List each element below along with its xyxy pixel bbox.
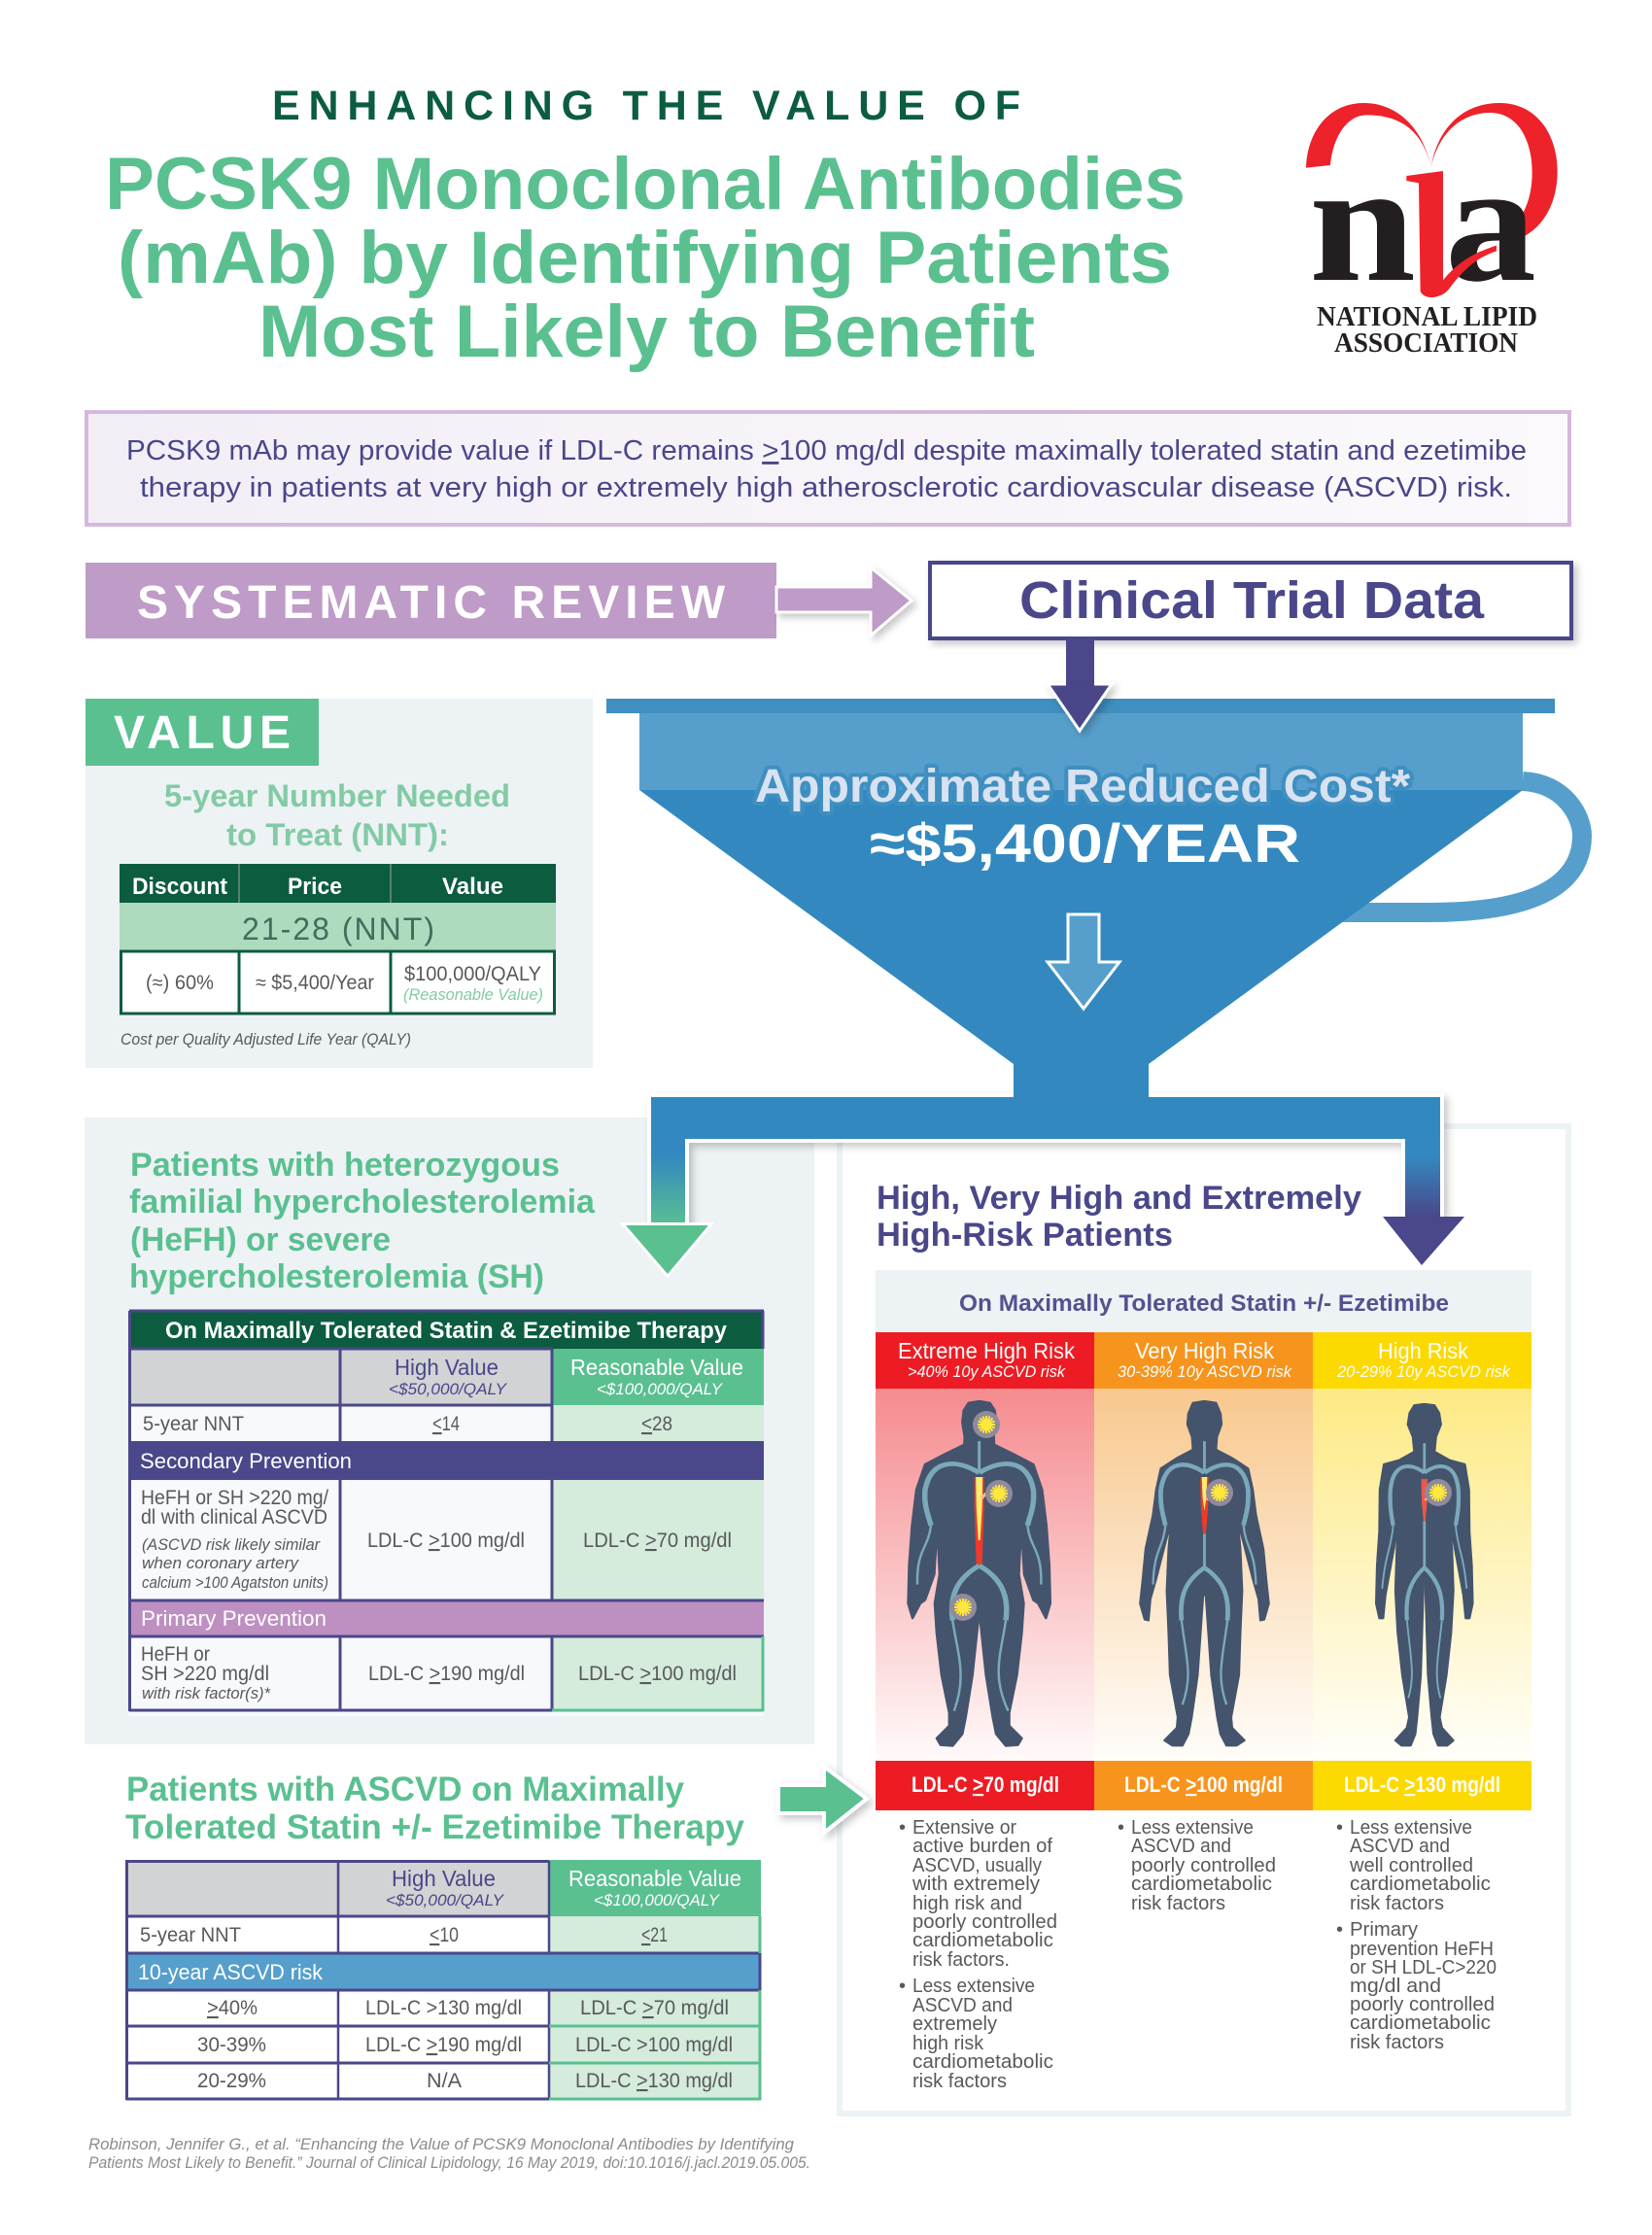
value tab bbox=[86, 699, 319, 766]
NNT table: Value bbox=[442, 874, 503, 900]
arrow: ASCVD table to risk thresholds bbox=[778, 1767, 867, 1833]
figure: large body bbox=[909, 1401, 1050, 1746]
box: clinical trial data bbox=[930, 563, 1571, 638]
bullets: high risk bbox=[1336, 1817, 1497, 2053]
bullets: extreme high risk: Extensive or bbox=[912, 1817, 1016, 1839]
ASCVD value table: LDL-C >100 mg/dl bbox=[575, 2034, 733, 2056]
funnel bbox=[606, 699, 1582, 1108]
bullets: high risk: poorly controlled bbox=[1350, 1994, 1495, 2015]
funnel body bbox=[639, 790, 1523, 1108]
column: very high risk: Very High Risk bbox=[1135, 1338, 1274, 1363]
ASCVD value table: LDL-C >190 mg/dl bbox=[365, 2034, 522, 2056]
funnel rim bbox=[606, 699, 1555, 713]
NNT table: Discount bbox=[132, 874, 227, 900]
ASCVD value table: 10-year ASCVD risk bbox=[138, 1960, 324, 1984]
icon: plaque burst heart medium body bbox=[1206, 1479, 1233, 1506]
ASCVD value table: >40% bbox=[207, 1997, 258, 2019]
bullets: high risk: mg/dl and bbox=[1350, 1976, 1441, 1997]
arrow: review to clinical trial data bbox=[776, 567, 912, 636]
bullets: very high risk: ASCVD and bbox=[1131, 1836, 1231, 1857]
bullets: high risk: prevention HeFH bbox=[1350, 1939, 1494, 1960]
ASCVD value table bbox=[126, 1860, 761, 2100]
panel: high risk patients bbox=[840, 1126, 1568, 2114]
left arrow head bbox=[626, 1225, 708, 1274]
icon: red heart bbox=[1306, 103, 1558, 238]
right branch bbox=[1405, 1139, 1440, 1218]
bullets: high risk: cardiometabolic bbox=[1350, 1874, 1491, 1895]
right arrow head bbox=[1383, 1217, 1464, 1265]
column: high risk: 20-29% 10y ASCVD risk bbox=[1336, 1362, 1511, 1381]
bullets: very high risk: risk factors bbox=[1131, 1893, 1225, 1914]
bullets: extreme high risk: with extremely bbox=[912, 1874, 1040, 1895]
ASCVD value table: <$100,000/QALY bbox=[594, 1891, 721, 1909]
panel: value bbox=[86, 699, 593, 1068]
bullets: extreme high risk: high risk and bbox=[912, 1893, 1022, 1914]
icon: plaque burst head bbox=[973, 1411, 1000, 1438]
bullets: high risk: ASCVD and bbox=[1350, 1836, 1450, 1857]
reduced cost text: Approximate Reduced Cost* bbox=[755, 761, 1410, 812]
banner: systematic review: SYSTEMATIC REVIEW bbox=[137, 577, 726, 629]
HeFH value table bbox=[128, 1311, 764, 1716]
ASCVD value table: LDL-C >130 mg/dl bbox=[365, 1997, 522, 2019]
bullets: very high risk bbox=[1118, 1817, 1276, 1914]
funnel inner arrow bbox=[1048, 914, 1119, 1009]
HeFH value table: (ASCVD risk likely similar bbox=[142, 1535, 321, 1554]
QALY footnote: Cost per Quality Adjusted Life Year (QALY) bbox=[120, 1030, 411, 1049]
bullets: high risk: risk factors bbox=[1350, 2032, 1444, 2053]
summary callout: therapy in patients at very high or extremely high atherosclerotic cardiovascular disease (ASCVD) risk. bbox=[140, 472, 1512, 503]
ASCVD value table: Reasonable Value bbox=[568, 1866, 741, 1891]
NNT table: (Reasonable Value) bbox=[403, 985, 543, 1004]
bullets: extreme high risk: risk factors bbox=[912, 2071, 1007, 2092]
HeFH heading: Patients with heterozygous bbox=[130, 1147, 560, 1184]
ASCVD heading bbox=[125, 1771, 745, 1846]
value tab: VALUE bbox=[114, 707, 291, 759]
bullets: high risk: Less extensive bbox=[1350, 1817, 1472, 1839]
LDL-C thresholds: LDL-C >130 mg/dl bbox=[1344, 1772, 1500, 1797]
figure: medium body bbox=[1140, 1401, 1269, 1745]
NNT table: (≈) 60% bbox=[146, 972, 214, 994]
bullets: high risk: well controlled bbox=[1349, 1855, 1473, 1876]
ASCVD heading: Tolerated Statin +/- Ezetimibe Therapy bbox=[125, 1808, 745, 1846]
HeFH value table: <$100,000/QALY bbox=[597, 1380, 724, 1398]
ASCVD value table: 30-39% bbox=[197, 2034, 266, 2056]
reduced cost text: ≈$5,400/YEAR bbox=[870, 812, 1300, 874]
HeFH value table: dl with clinical ASCVD bbox=[141, 1506, 327, 1529]
figure: slim body bbox=[1376, 1404, 1472, 1745]
HeFH value table: HeFH or SH >220 mg/ bbox=[141, 1487, 328, 1509]
banner: systematic review bbox=[86, 563, 776, 638]
NNT heading: to Treat (NNT): bbox=[226, 817, 449, 852]
ASCVD value table: <$50,000/QALY bbox=[386, 1891, 505, 1909]
ASCVD value table: <10 bbox=[430, 1924, 459, 1946]
main title: Most Likely to Benefit bbox=[258, 291, 1035, 373]
logo wordmark: NATIONAL LIPID bbox=[1317, 302, 1537, 332]
risk heading bbox=[877, 1180, 1361, 1254]
bullets: very high risk: poorly controlled bbox=[1131, 1855, 1276, 1876]
logo letter a: a bbox=[1445, 128, 1536, 318]
LDL-C thresholds bbox=[912, 1772, 1500, 1797]
citation: Robinson, Jennifer G., et al. “Enhancing the Value of PCSK9 Monoclonal Antibodies by Identifying bbox=[88, 2136, 795, 2153]
NNT heading: 5-year Number Needed bbox=[164, 778, 510, 813]
bullets: high risk: or SH LDL-C>220 bbox=[1350, 1957, 1497, 1978]
therapy subheading: On Maximally Tolerated Statin +/- Ezetimibe bbox=[959, 1290, 1449, 1317]
logo: National Lipid Association bbox=[1306, 103, 1558, 359]
HeFH value table: Reasonable Value bbox=[570, 1355, 743, 1380]
HeFH value table: Primary Prevention bbox=[141, 1606, 327, 1631]
bullets: extreme high risk: ASCVD and bbox=[912, 1995, 1013, 2016]
HeFH heading: hypercholesterolemia (SH) bbox=[129, 1258, 544, 1295]
column: extreme high risk bbox=[876, 1332, 1094, 1810]
column: very high risk: 30-39% 10y ASCVD risk bbox=[1118, 1362, 1292, 1381]
panel: ASCVD patients bbox=[125, 1771, 761, 2100]
bullets: extreme high risk: cardiometabolic bbox=[912, 1930, 1053, 1951]
main title: (mAb) by Identifying Patients bbox=[118, 217, 1172, 299]
HeFH value table: LDL-C >100 mg/dl bbox=[578, 1663, 737, 1685]
left branch bbox=[651, 1139, 685, 1226]
HeFH value table: <28 bbox=[641, 1413, 672, 1435]
box: clinical trial data: Clinical Trial Data bbox=[1019, 571, 1485, 630]
summary callout: PCSK9 mAb may provide value if LDL-C remains >100 mg/dl despite maximally tolerated statin and ezetimibe bbox=[126, 435, 1527, 466]
LDL-C thresholds: LDL-C >70 mg/dl bbox=[912, 1772, 1059, 1797]
HeFH value table: Secondary Prevention bbox=[140, 1449, 352, 1473]
HeFH value table: SH >220 mg/dl bbox=[141, 1663, 269, 1685]
citation: Patients Most Likely to Benefit.” Journal of Clinical Lipidology, 16 May 2019, doi:10.1016/j.jacl.2019.05.005. bbox=[88, 2154, 810, 2172]
column: extreme high risk: Extreme High Risk bbox=[898, 1338, 1075, 1363]
HeFH value table: when coronary artery bbox=[142, 1554, 300, 1572]
HeFH value table: <$50,000/QALY bbox=[389, 1380, 508, 1398]
bullets: extreme high risk: • bbox=[899, 1817, 906, 1839]
HeFH value table: LDL-C >190 mg/dl bbox=[368, 1663, 525, 1685]
ASCVD value table: N/A bbox=[427, 2070, 462, 2092]
therapy subheading bbox=[876, 1270, 1532, 1332]
icon: plaque burst heart large body bbox=[985, 1480, 1013, 1507]
NNT table bbox=[120, 864, 556, 1014]
NNT table: Price bbox=[288, 874, 342, 900]
HeFH value table: with risk factor(s)* bbox=[142, 1684, 271, 1702]
summary callout bbox=[86, 412, 1569, 525]
funnel outflow branches bbox=[626, 1097, 1464, 1274]
bullets: high risk: risk factors bbox=[1350, 1893, 1444, 1914]
funnel handle bbox=[1341, 781, 1582, 912]
logo wordmark bbox=[1317, 302, 1537, 359]
risk heading: High-Risk Patients bbox=[877, 1217, 1173, 1254]
ASCVD value table: LDL-C >130 mg/dl bbox=[575, 2070, 733, 2092]
ASCVD value table: LDL-C >70 mg/dl bbox=[580, 1997, 729, 2019]
logo wordmark: ASSOCIATION bbox=[1334, 328, 1518, 359]
bullets: extreme high risk: • bbox=[899, 1976, 906, 1997]
icon: plaque burst heart slim body bbox=[1425, 1479, 1452, 1506]
bullets: very high risk: Less extensive bbox=[1131, 1817, 1254, 1839]
HeFH value table: High Value bbox=[395, 1355, 499, 1380]
panel: HeFH or severe hypercholesterolemia bbox=[85, 1118, 814, 1744]
bullets: extreme high risk: ASCVD, usually bbox=[912, 1855, 1042, 1876]
bullets: very high risk: cardiometabolic bbox=[1131, 1874, 1272, 1895]
column: extreme high risk: >40% 10y ASCVD risk bbox=[908, 1362, 1066, 1381]
funnel light band bbox=[639, 713, 1523, 790]
main title: PCSK9 Monoclonal Antibodies bbox=[105, 143, 1186, 225]
HeFH value table: HeFH or bbox=[141, 1643, 210, 1666]
reduced cost text bbox=[755, 761, 1410, 874]
bullets: extreme high risk: Less extensive bbox=[912, 1976, 1035, 1997]
bullets: high risk: • bbox=[1336, 1817, 1343, 1839]
ASCVD value table: 20-29% bbox=[197, 2070, 266, 2092]
NNT table: 21-28 (NNT) bbox=[242, 911, 434, 946]
bullets: high risk: Primary bbox=[1350, 1919, 1418, 1941]
eyebrow title: ENHANCING THE VALUE OF bbox=[272, 83, 1020, 129]
ASCVD value table: High Value bbox=[392, 1866, 496, 1891]
HeFH value table: LDL-C >100 mg/dl bbox=[367, 1530, 525, 1552]
bullets: high risk: • bbox=[1336, 1919, 1343, 1941]
HeFH heading: familial hypercholesterolemia bbox=[129, 1184, 596, 1221]
ASCVD heading: Patients with ASCVD on Maximally bbox=[126, 1771, 685, 1808]
HeFH value table: calcium >100 Agatston units) bbox=[142, 1573, 328, 1592]
HeFH value table: LDL-C >70 mg/dl bbox=[583, 1530, 732, 1552]
citation bbox=[88, 2136, 810, 2172]
logo letter n: n bbox=[1309, 128, 1416, 318]
main title bbox=[105, 143, 1186, 373]
HeFH value table: 5-year NNT bbox=[143, 1413, 244, 1435]
bullets: extreme high risk: risk factors. bbox=[912, 1949, 1010, 1971]
bullets: high risk: cardiometabolic bbox=[1350, 2012, 1491, 2034]
bullets: extreme high risk: extremely bbox=[912, 2013, 997, 2035]
HeFH heading: (HeFH) or severe bbox=[130, 1221, 391, 1258]
HeFH value table: On Maximally Tolerated Statin & Ezetimibe Therapy bbox=[165, 1318, 728, 1344]
ASCVD value table: 5-year NNT bbox=[140, 1924, 241, 1946]
HeFH value table: <14 bbox=[432, 1413, 460, 1435]
bullets: extreme high risk bbox=[899, 1817, 1057, 2092]
bullets: very high risk: • bbox=[1118, 1817, 1124, 1839]
NNT table: $100,000/QALY bbox=[404, 963, 541, 985]
ASCVD value table: <21 bbox=[641, 1924, 668, 1946]
LDL-C thresholds: LDL-C >100 mg/dl bbox=[1124, 1772, 1283, 1797]
column: very high risk bbox=[1094, 1332, 1313, 1810]
bullets: extreme high risk: active burden of bbox=[912, 1836, 1052, 1857]
bullets: extreme high risk: cardiometabolic bbox=[912, 2051, 1053, 2073]
bullets: extreme high risk: poorly controlled bbox=[912, 1911, 1057, 1933]
bullets: extreme high risk: high risk bbox=[912, 2033, 984, 2054]
icon: plaque burst leg bbox=[949, 1594, 977, 1621]
arrow: clinical trial data to funnel bbox=[1048, 639, 1112, 731]
NNT heading bbox=[164, 778, 510, 852]
logo letter l bbox=[1406, 171, 1497, 297]
column: high risk bbox=[1313, 1332, 1532, 1810]
HeFH heading bbox=[129, 1147, 596, 1295]
column: high risk: High Risk bbox=[1378, 1338, 1468, 1363]
risk heading: High, Very High and Extremely bbox=[877, 1180, 1361, 1217]
NNT table: ≈ $5,400/Year bbox=[256, 972, 374, 994]
